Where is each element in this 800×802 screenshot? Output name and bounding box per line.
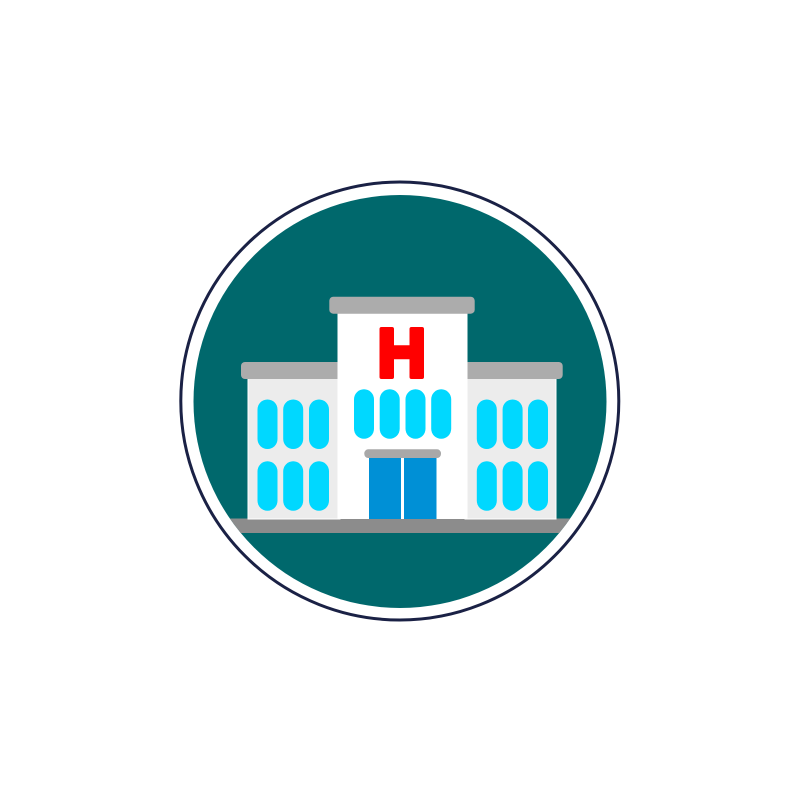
side roof left [241,362,341,379]
side roof right [464,362,563,379]
right wing windows [477,400,548,511]
central windows [354,389,451,439]
hospital badge infographic [179,180,620,622]
central block [338,312,468,519]
teal disc [194,195,606,608]
door canopy [364,449,441,458]
icon: red H sign [380,327,424,379]
left wing [248,378,340,519]
entrance doors [369,457,436,519]
ground strip [230,518,570,533]
top roof [329,297,475,314]
icon: hospital building [241,297,563,519]
outer navy ring [181,182,619,620]
left wing windows [258,400,329,511]
right wing [465,378,556,519]
